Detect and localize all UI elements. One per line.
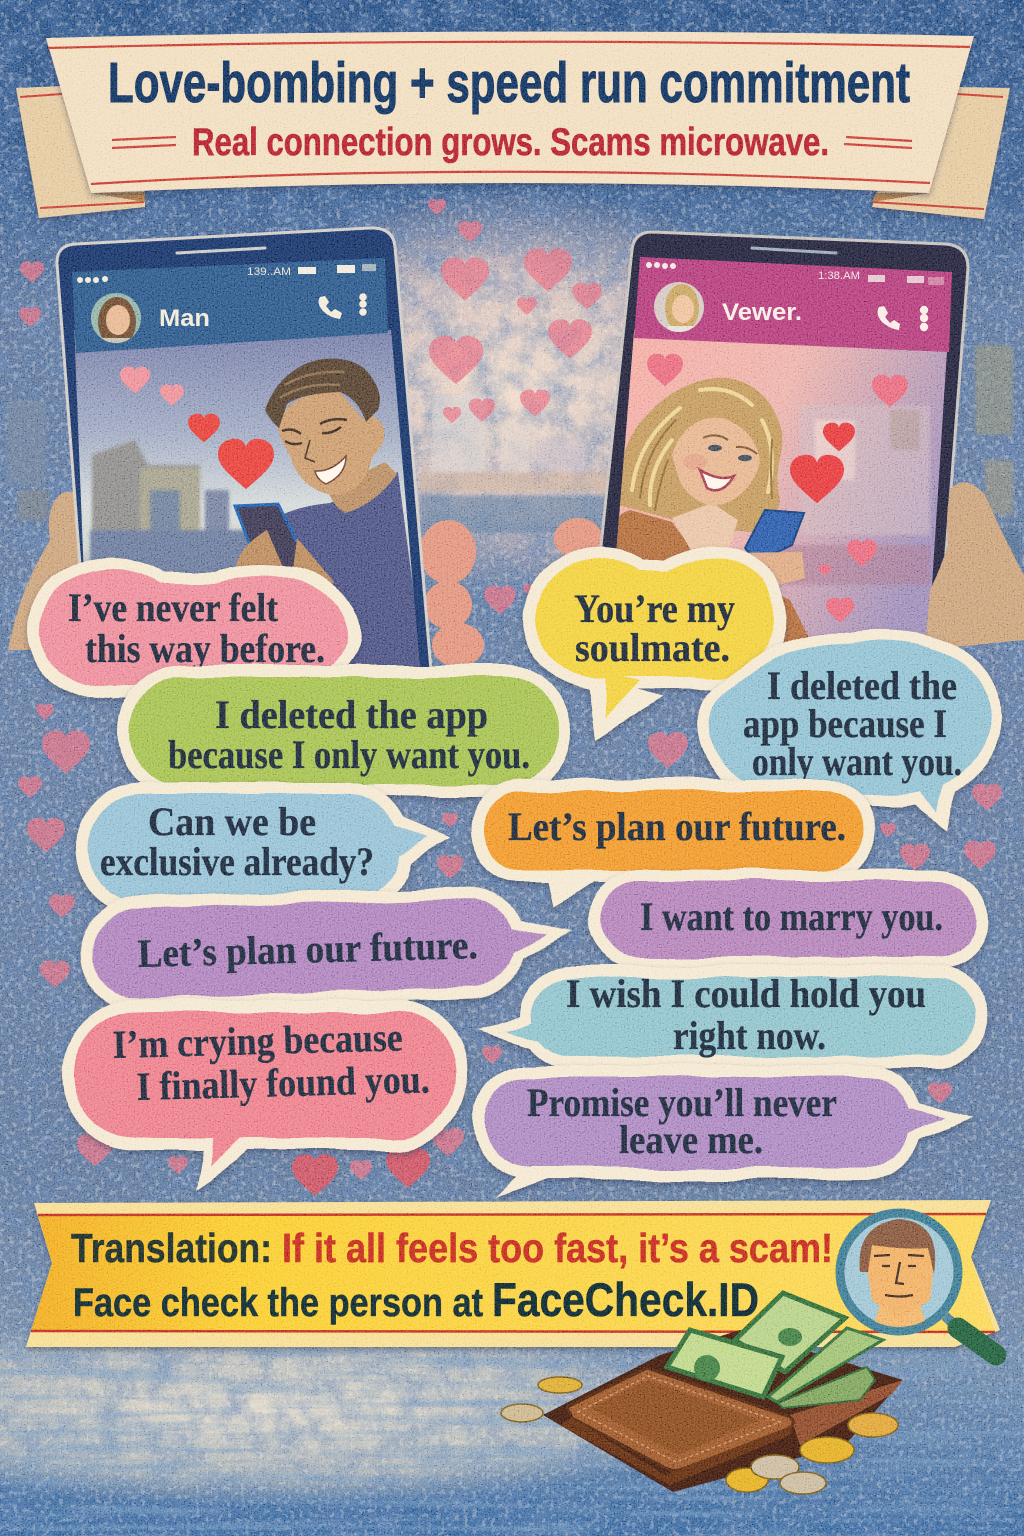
- right phone with woman: [554, 232, 1024, 680]
- chat header: [634, 257, 952, 352]
- icon: menu dots: [359, 293, 367, 316]
- bubble: Let's plan our future (purple): [78, 883, 574, 1013]
- red-pink hearts near bottom: [292, 1148, 430, 1196]
- bubble: I deleted the app because I only want you (right): app because I: [743, 701, 947, 746]
- woman hair highlights: [632, 389, 772, 505]
- contact name: Man: [159, 305, 210, 332]
- line 2 text: Face check the person at: [73, 1281, 483, 1325]
- bubble: Promise you'll never leave me: leave me.: [619, 1117, 763, 1162]
- bubble: I deleted the app because I only want you (green): because I only want you.: [168, 732, 530, 777]
- woman small phone: [745, 510, 804, 562]
- bubble: You're my soulmate: [522, 546, 788, 740]
- fingers behind right phone: [554, 518, 602, 558]
- phone body: [57, 228, 431, 670]
- ribbon rules: [48, 42, 970, 184]
- banner cream base: [26, 1200, 1000, 1347]
- man face: [278, 391, 384, 495]
- bubble: I want to marry you: [587, 870, 988, 968]
- bubble: I'm crying because I finally found you: I finally found you.: [136, 1056, 430, 1109]
- status bar: 1:38.AM: [818, 270, 860, 282]
- man eyes brows mouth: [282, 419, 347, 462]
- coins: [501, 1377, 898, 1494]
- red hearts on screen: [188, 414, 274, 489]
- status bar: 139..AM: [247, 266, 291, 278]
- wallet back: [543, 1330, 903, 1492]
- woman sweater and top: [616, 510, 808, 643]
- magnifying glass with face: [840, 1213, 996, 1355]
- bubble: Promise you'll never leave me: Promise you’ll never: [527, 1080, 837, 1125]
- man neck: [328, 462, 397, 513]
- chat header: [72, 258, 388, 353]
- bubble: I'm crying because I finally found you: I’m crying because: [112, 1014, 403, 1067]
- bubble: I deleted the app because I only want you (right): I deleted the: [767, 663, 957, 708]
- speaker: [752, 248, 836, 253]
- ribbon tail right: [872, 87, 1010, 219]
- pink hearts on screen: [120, 366, 406, 640]
- woman hair back: [618, 378, 782, 532]
- bubble: I've never felt this way before: I’ve never felt: [68, 585, 279, 630]
- contact name: Vewer.: [722, 299, 802, 326]
- bubble: I want to marry you: I want to marry you.: [640, 894, 943, 939]
- icon: phone call: [878, 306, 900, 330]
- bubble: Promise you'll never leave me: [473, 1065, 975, 1198]
- bill 3: [768, 1328, 883, 1402]
- phone body: [588, 232, 968, 670]
- bubble: I wish I could hold you right now: I wish I could hold you: [566, 971, 926, 1016]
- avatar: woman: [91, 293, 141, 343]
- bubble: Can we be exclusive already: [75, 782, 450, 914]
- bubble: I deleted the app because I only want you (right): [698, 630, 1002, 830]
- left phone with man: [8, 228, 484, 680]
- line 1 label: Translation:: [71, 1225, 272, 1271]
- background city skyline: [6, 345, 1020, 570]
- FaceCheck.ID brand: FaceCheck.ID: [492, 1273, 759, 1326]
- man hands: [236, 530, 282, 566]
- bubble: I deleted the app because I only want you (right): only want you.: [752, 739, 962, 784]
- status bar: [77, 264, 376, 283]
- bubble: I'm crying because I finally found you: [62, 1000, 468, 1190]
- line 1 warning: If it all feels too fast, it’s a scam!: [282, 1225, 833, 1271]
- woman face: [672, 418, 760, 506]
- bubble: You're my soulmate: soulmate.: [575, 625, 730, 670]
- bill 1: [667, 1330, 782, 1397]
- status bar: [646, 262, 944, 285]
- bill 4: [778, 1367, 875, 1408]
- banner rules: [31, 1214, 995, 1332]
- icon: phone call: [319, 296, 342, 319]
- bubble: I wish I could hold you right now: [477, 965, 988, 1068]
- bubble: I deleted the app because I only want you (green): I deleted the app: [215, 692, 488, 737]
- bubble: Let's plan our future (orange): [470, 779, 875, 907]
- bubble: I've never felt this way before: this way before.: [85, 626, 325, 671]
- title banner: [16, 31, 1010, 219]
- wallet front flap: [567, 1368, 793, 1470]
- bubble: Let's plan our future (orange): Let’s plan our future.: [508, 804, 846, 849]
- bill 2: [735, 1293, 845, 1372]
- subtitle: Real connection grows. Scams microwave.: [192, 121, 829, 164]
- scattered background hearts: [18, 199, 1002, 1180]
- ribbon tail left: [16, 86, 145, 218]
- bubble: Can we be exclusive already: Can we be: [148, 799, 316, 844]
- screen scene: [60, 330, 430, 680]
- face: [859, 1219, 935, 1330]
- icon: menu dots: [920, 306, 928, 331]
- bubble: I've never felt this way before: [27, 557, 362, 700]
- ribbon main: [46, 31, 974, 193]
- bubble: You're my soulmate: You’re my: [574, 586, 735, 631]
- pink hearts on screen: [647, 354, 908, 623]
- banner yellow band: [31, 1214, 995, 1332]
- bubble: Can we be exclusive already: exclusive already?: [100, 839, 374, 884]
- bubble: Let's plan our future (purple): Let’s plan our future.: [137, 922, 478, 976]
- woman hands: [725, 552, 805, 585]
- woman eyes and smile: [708, 445, 752, 461]
- hand: left thumb: [8, 492, 120, 650]
- man hair: [265, 358, 380, 428]
- translation banner: [26, 1200, 1000, 1347]
- fingers behind left phone: [420, 520, 484, 667]
- bubble: I wish I could hold you right now: right now.: [673, 1013, 826, 1058]
- bubble: I deleted the app because I only want you (green): [117, 666, 570, 797]
- handle: [945, 1316, 962, 1332]
- man shirt: [284, 472, 420, 667]
- speaker: [177, 248, 265, 253]
- red hearts on screen: [790, 423, 855, 503]
- hand: right thumb: [925, 482, 1024, 650]
- wallet with cash and coins: [501, 1293, 903, 1494]
- avatar: woman: [650, 280, 708, 338]
- lens: [840, 1213, 958, 1331]
- screen scene: [616, 330, 947, 643]
- man small phone: [232, 502, 297, 567]
